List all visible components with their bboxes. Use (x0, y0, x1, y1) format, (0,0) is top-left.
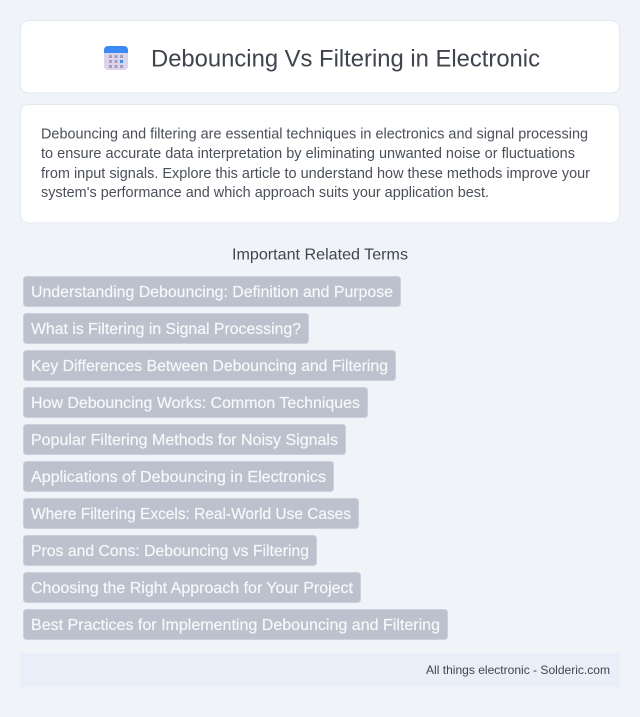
term button 4 (24, 388, 368, 418)
term button 6 (24, 462, 334, 492)
heading: important related terms: Important Related Terms (232, 246, 408, 264)
term button 8 (24, 536, 316, 566)
title: Debouncing Vs Filtering in Electronic (151, 46, 540, 72)
term button 2 (24, 314, 308, 344)
term button 10 (24, 610, 448, 640)
term button 1 (24, 276, 400, 306)
panel: introduction (20, 104, 620, 223)
panel: title card (20, 20, 620, 93)
term button 10: Best Practices for Implementing Debouncing and Filtering (31, 617, 440, 634)
term button 7 (24, 498, 358, 528)
icon: calendar (104, 46, 128, 70)
term button 1: Understanding Debouncing: Definition and Purpose (31, 284, 393, 301)
term button 2: What is Filtering in Signal Processing? (31, 321, 301, 338)
term button 3 (24, 350, 396, 380)
text block: introduction: from input signals. Explore this article to understand how these methods improve your (41, 166, 590, 182)
text block: introduction: Debouncing and filtering are essential techniques in electronics and signal processing (41, 127, 588, 143)
term button 3: Key Differences Between Debouncing and Filtering (31, 358, 388, 375)
term button 6: Applications of Debouncing in Electronics (31, 469, 326, 486)
footer (20, 653, 620, 687)
text block: introduction (41, 127, 590, 201)
term button 4: How Debouncing Works: Common Techniques (31, 395, 360, 412)
text block: introduction: to ensure accurate data interpretation by eliminating unwanted noise or fluctuations (41, 146, 575, 162)
text block: introduction: system's performance and which approach suits your application best. (41, 185, 489, 201)
term button 5: Popular Filtering Methods for Noisy Signals (31, 432, 338, 449)
term button 5 (24, 424, 346, 454)
term button 8: Pros and Cons: Debouncing vs Filtering (31, 543, 309, 560)
term button 9 (24, 572, 360, 602)
term button 9: Choosing the Right Approach for Your Project (31, 580, 354, 597)
term button 7: Where Filtering Excels: Real-World Use Cases (31, 506, 351, 523)
list: related terms (24, 276, 448, 640)
footer: All things electronic - Solderic.com (426, 663, 610, 677)
